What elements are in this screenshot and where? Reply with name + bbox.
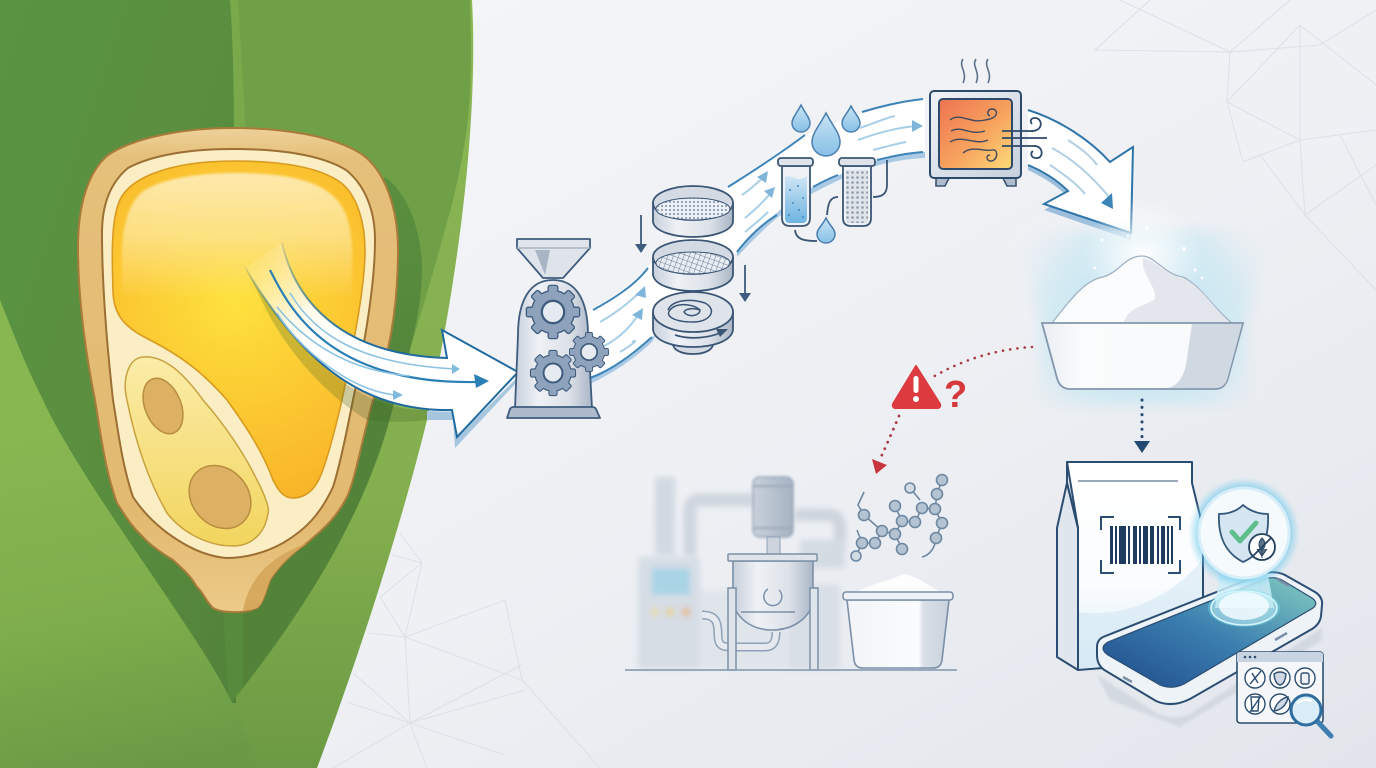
arrow body (245, 243, 518, 437)
glow highlight (1083, 198, 1203, 318)
tub powder (857, 574, 940, 592)
dark left leaf (0, 0, 236, 703)
powder pile (1052, 256, 1232, 323)
germ spot lower (176, 453, 264, 541)
bag gusset (1057, 483, 1078, 670)
arrow shadow (1028, 165, 1131, 240)
hopper (517, 239, 590, 278)
oven feet (936, 178, 1016, 186)
arrow: extraction from kernel (245, 243, 518, 448)
powder shadow side (1124, 258, 1230, 322)
vessel details (741, 589, 795, 612)
air swirls (950, 109, 997, 161)
low-poly background lines (333, 0, 1376, 768)
kernel bran outer (78, 128, 398, 612)
panel: chemical factory (625, 474, 957, 670)
arrow body (1028, 110, 1133, 233)
arrow shadow on kernel (245, 267, 428, 422)
kernel inner layer (102, 149, 375, 558)
ingredient panel (1237, 652, 1331, 736)
badge (1188, 477, 1300, 589)
arrow: dotted navy to package (1134, 400, 1150, 453)
drop lower (817, 218, 835, 243)
band lower shadow (590, 152, 925, 384)
icon: drying oven (930, 59, 1047, 186)
oven heat window (939, 99, 1012, 169)
sieve bottom with spiral (653, 292, 733, 354)
tube with liquid (778, 158, 813, 226)
bin (1042, 323, 1243, 389)
glow (1013, 230, 1275, 405)
package bag (1057, 462, 1203, 670)
tube connectors (795, 160, 887, 241)
kernel tip shading (243, 543, 307, 610)
germ spot upper (135, 372, 191, 440)
arrow: sieve down right (739, 265, 751, 302)
reactor motor (753, 477, 793, 537)
icon: washing tubes and water drops (778, 105, 887, 243)
projection ring (1208, 589, 1280, 627)
powder particles (1094, 226, 1203, 279)
arrow: to powder bin (1028, 110, 1133, 240)
no-wheat symbol (1249, 534, 1275, 560)
wind exhaust (1002, 118, 1047, 158)
projection cone (1215, 575, 1274, 608)
reactor legs (728, 588, 736, 670)
mill body (515, 280, 592, 408)
molecule (851, 474, 948, 561)
bag seal line (1078, 480, 1178, 482)
bin shaded side (1165, 324, 1242, 388)
endosperm (112, 161, 365, 498)
band edge lines (590, 99, 923, 378)
band flow arrows (600, 116, 918, 352)
midrib bottom (223, 610, 243, 703)
floor line (625, 669, 957, 671)
phone body (1097, 572, 1322, 704)
arrow outline (1028, 110, 1133, 233)
phone shadow (1097, 628, 1322, 727)
arrow flow lines (1050, 140, 1110, 198)
arrow: dotted red to factory (872, 416, 899, 474)
leaf base (0, 0, 473, 768)
sieve top (653, 186, 733, 237)
tube with granules (839, 158, 875, 226)
scan brackets (1101, 517, 1180, 573)
magnifier (1291, 695, 1331, 736)
pipes (702, 615, 776, 647)
allergen icons (1245, 668, 1315, 714)
badge halo (1188, 477, 1300, 589)
arrow stream lines (270, 270, 478, 382)
arrow: sieve down left (635, 215, 647, 253)
panel: package and phone (1057, 462, 1331, 736)
steam (962, 59, 989, 83)
bag swoosh (1079, 560, 1202, 669)
endosperm highlight (122, 173, 352, 310)
germ (125, 357, 268, 546)
drop right (842, 106, 860, 132)
oven case (930, 91, 1021, 178)
drop left (792, 105, 810, 132)
badge disc (1199, 488, 1289, 578)
question mark: ? (944, 374, 967, 416)
bag front (1067, 462, 1203, 670)
gear lower (531, 351, 575, 395)
check mark (1232, 523, 1256, 541)
upper right leaf (232, 0, 471, 420)
icon: powder bin with glow (1013, 198, 1275, 405)
icon: sieve stack (653, 186, 733, 354)
gear large (527, 286, 579, 338)
barcode (1110, 526, 1173, 564)
reactor vessel (733, 561, 813, 630)
band (585, 99, 925, 380)
arrow shadow on background (427, 377, 518, 448)
arrow: dotted red to warning (933, 347, 1032, 377)
gear right (570, 333, 608, 371)
arrow outline (245, 243, 518, 437)
midrib top (230, 0, 246, 135)
shield (1219, 505, 1268, 562)
icon: grinding mill (507, 239, 608, 418)
dark right leaf and kernel shadow (220, 177, 422, 703)
lower left leaf (0, 300, 257, 768)
panel: corn kernel cross-section (78, 128, 398, 612)
mill base (507, 407, 600, 418)
arrow: process band (585, 99, 925, 384)
blurred background machinery (638, 477, 845, 670)
phone details (1123, 579, 1289, 682)
tub body (847, 600, 949, 668)
phone screen (1103, 578, 1316, 687)
icon: warning triangle (893, 366, 940, 408)
panel: green leaves (0, 0, 473, 768)
tub rim (843, 592, 953, 600)
sieve middle (653, 240, 733, 291)
drop big (812, 113, 840, 156)
